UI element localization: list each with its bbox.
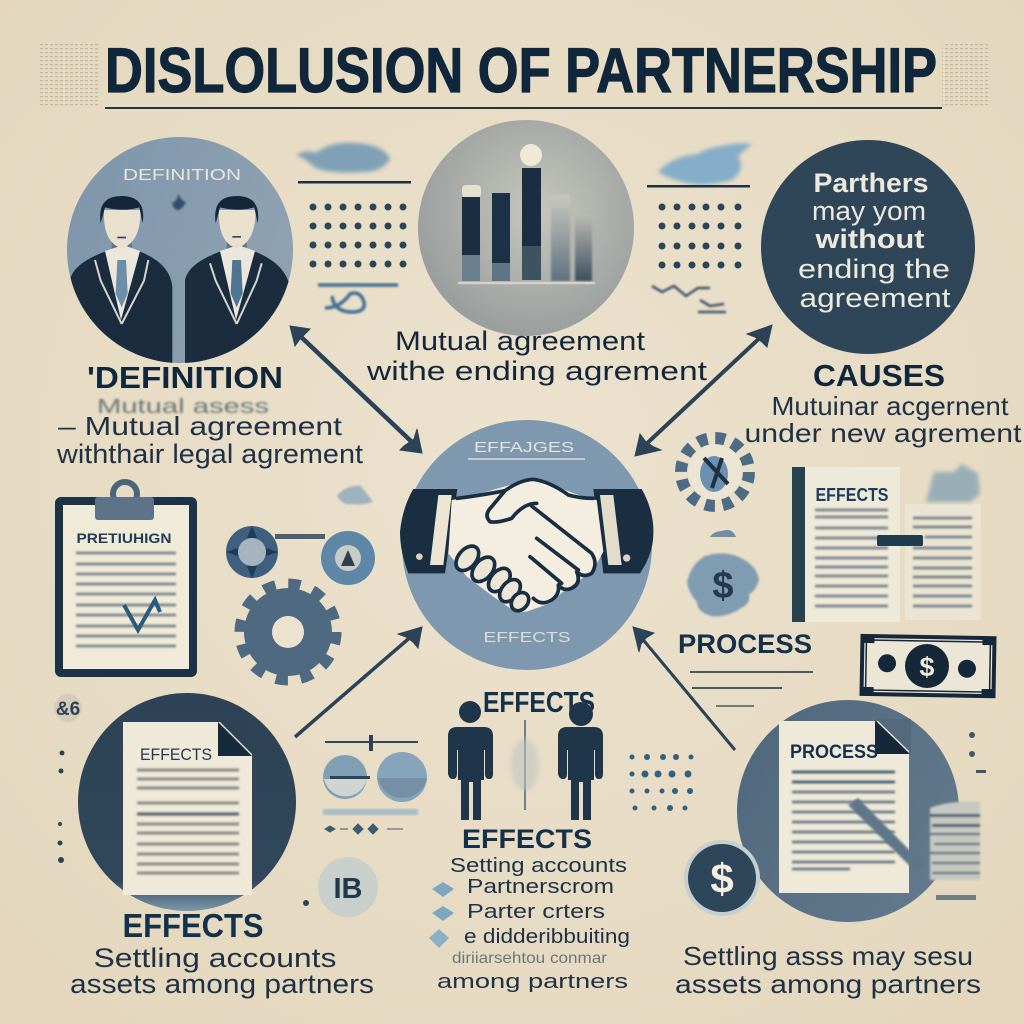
panel: effects open document: EFFECTS [816, 485, 888, 505]
decoration: dot rows [630, 754, 694, 811]
arrow: top right [635, 325, 772, 456]
icon: tiny symbol left: &6 [56, 699, 80, 720]
icon: two businessmen [70, 196, 290, 367]
panel: left dots decoration [296, 143, 411, 312]
icon: dollar gear: $ [712, 565, 734, 607]
icon: dollar coin: $ [710, 855, 734, 902]
icon: paper stack [930, 802, 980, 880]
heading: effects: EFFECTS [462, 824, 592, 854]
heading: process [678, 629, 813, 706]
panel: partners circle: may yom [812, 196, 926, 226]
panel: effects circle with document: EFFECTS [140, 745, 212, 764]
panel: definition circle: DEFINITION [123, 167, 241, 184]
icon: tiny symbol left [54, 694, 82, 863]
icon: large gear [241, 585, 335, 679]
panel: process circle with document: PROCESS [790, 742, 878, 763]
panel: right dots decoration [647, 143, 752, 312]
icon: two people [448, 701, 603, 820]
panel: partners circle: Parthers [814, 168, 928, 198]
arrow: top left [290, 326, 422, 453]
text: effects list: Partnerscrom [467, 876, 614, 898]
panel: partners circle: without [814, 224, 925, 254]
text: effects list: e didderibbuiting [464, 926, 630, 948]
icon: dollar coin [684, 840, 760, 916]
icon: side marks right [936, 732, 986, 900]
icon: lock badge [303, 857, 378, 917]
text: effects list [429, 855, 630, 993]
text: causes body [744, 391, 1022, 448]
text: process bottom body: Settling asss may sesu [683, 941, 973, 971]
heading: process: PROCESS [678, 629, 812, 659]
text: centre agreement: Mutual agreement [395, 326, 646, 356]
arrow: bottom right [633, 627, 735, 750]
text: causes body: Mutuinar acgernent [772, 391, 1009, 421]
panel: definition circle [67, 137, 293, 367]
icons: small gear badges [226, 486, 375, 585]
icon: split circle [323, 735, 427, 834]
heading: definition: 'DEFINITION [87, 360, 283, 395]
icon: banknote: $ [919, 652, 935, 682]
icon: lock badge: IB [334, 873, 362, 905]
panel: effects circle with document [78, 693, 296, 911]
icon: gear top right [681, 438, 749, 506]
heading: effects bottom left: EFFECTS [122, 907, 264, 944]
panel: process circle with document [737, 700, 959, 922]
panel: clipboard: PRETIUHIGN [76, 530, 172, 546]
text: effects bottom left body: Settling accounts [94, 943, 336, 973]
text: effects list: Setting accounts [450, 855, 627, 877]
text: centre agreement [366, 326, 708, 386]
panel: clipboard [59, 482, 193, 673]
icon: banknote [862, 636, 994, 696]
text: centre agreement: withe ending agrement [366, 356, 708, 386]
panel: effects open document [792, 464, 981, 622]
text: causes body: under new agrement [744, 418, 1022, 448]
heading: causes: CAUSES [813, 358, 945, 393]
text: process bottom body: assets among partners [675, 969, 981, 999]
text: effects list: among partners [437, 971, 628, 993]
panel: partners circle: ending the [798, 254, 950, 284]
text: effects bottom left body [70, 943, 374, 999]
text: definition body: Mutual asess [97, 396, 269, 418]
icon: handshake [400, 479, 653, 614]
panel: handshake circle: EFFAJGES [474, 439, 574, 456]
panel: bar chart circle [418, 120, 634, 336]
panel: handshake circle [400, 420, 653, 670]
text: definition body: – Mutual agreement [58, 411, 343, 441]
text: process bottom body [675, 941, 981, 999]
text: definition body [56, 396, 364, 469]
text: effects list: Parter crters [467, 901, 605, 923]
icon: pen [848, 798, 925, 872]
text: effects list: diriiarsehtou conmar [452, 950, 608, 967]
panel: partners circle: agreement [800, 283, 951, 313]
arrow: bottom left [295, 627, 422, 737]
icon: dollar gear [687, 530, 759, 616]
text: effects bottom left body: assets among partners [70, 969, 374, 999]
heading: effects top: EFFECTS [483, 687, 595, 719]
text: definition body: withthair legal agrement [56, 439, 364, 469]
panel: partners circle [761, 140, 975, 354]
panel: handshake circle: EFFECTS [484, 629, 570, 646]
